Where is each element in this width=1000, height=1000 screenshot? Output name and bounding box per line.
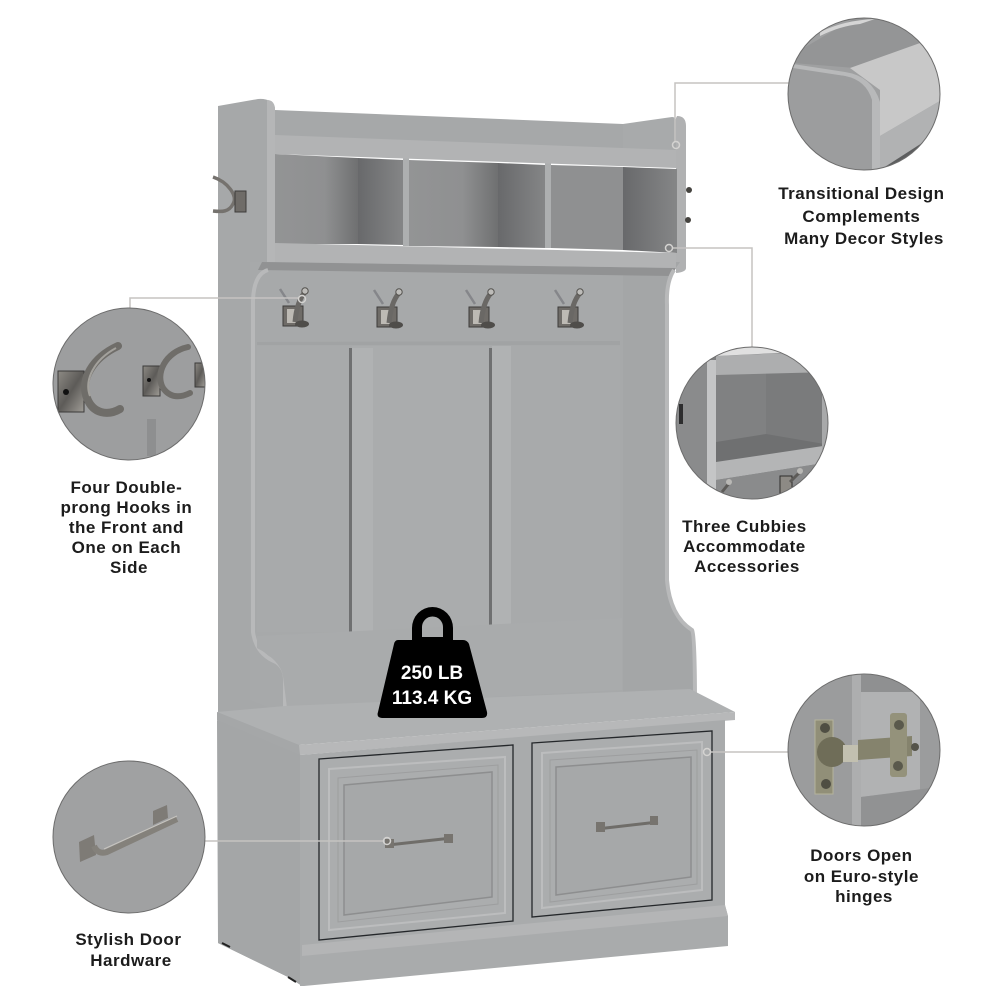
caption: hooks: the Front and	[69, 518, 184, 537]
caption: transitional design: Many Decor Styles	[784, 229, 944, 248]
detail circle: top corner	[788, 18, 940, 170]
beadboard planks	[257, 341, 620, 632]
leader lines	[130, 83, 792, 844]
weight capacity icon: 250 LB	[401, 663, 463, 684]
caption: hinges: hinges	[835, 887, 893, 906]
caption: transitional design: Transitional Design	[778, 184, 945, 203]
caption: cubbies: Accessories	[694, 557, 800, 576]
hall tree furniture	[213, 99, 735, 986]
detail circle: hinge	[788, 670, 940, 830]
upper and lower shelf fronts	[275, 135, 676, 168]
back panel	[250, 262, 696, 716]
weight capacity icon	[378, 607, 487, 718]
caption: hinges: on Euro-style	[804, 867, 919, 886]
weight capacity icon: 113.4 KG	[392, 688, 472, 709]
caption: door hardware: Stylish Door	[75, 930, 181, 949]
caption: hooks: One on Each	[72, 538, 181, 557]
bench back lower rail	[257, 618, 622, 708]
caption: cubbies: Accommodate	[683, 537, 806, 556]
bench cabinet front	[300, 720, 728, 986]
left side panel	[218, 99, 302, 986]
cubby interiors	[275, 154, 677, 253]
right drawer	[532, 731, 712, 917]
plinth	[302, 905, 728, 956]
right side hook tips	[685, 187, 692, 223]
left drawer	[319, 745, 513, 940]
caption: cubbies: Three Cubbies	[682, 517, 807, 536]
caption: hooks: Side	[110, 558, 148, 577]
panel edge highlights	[253, 270, 695, 716]
feet shadows	[222, 943, 296, 982]
caption: door hardware: Hardware	[90, 951, 172, 970]
detail circle: cubby	[676, 346, 828, 500]
hutch back wall	[275, 110, 623, 150]
front coat hooks	[280, 288, 584, 328]
caption: hooks: prong Hooks in	[61, 498, 192, 517]
shadow below shelf	[258, 262, 676, 276]
caption: hooks: Four Double-	[70, 478, 182, 497]
caption: hinges: Doors Open	[810, 846, 913, 865]
left side hook	[213, 177, 246, 212]
detail circle: door handle	[53, 761, 205, 913]
bench seat	[217, 689, 735, 745]
detail circle: hooks	[53, 308, 205, 460]
caption: transitional design: Complements	[802, 207, 920, 226]
bench cabinet side	[217, 720, 302, 986]
drawer handles	[385, 816, 658, 848]
